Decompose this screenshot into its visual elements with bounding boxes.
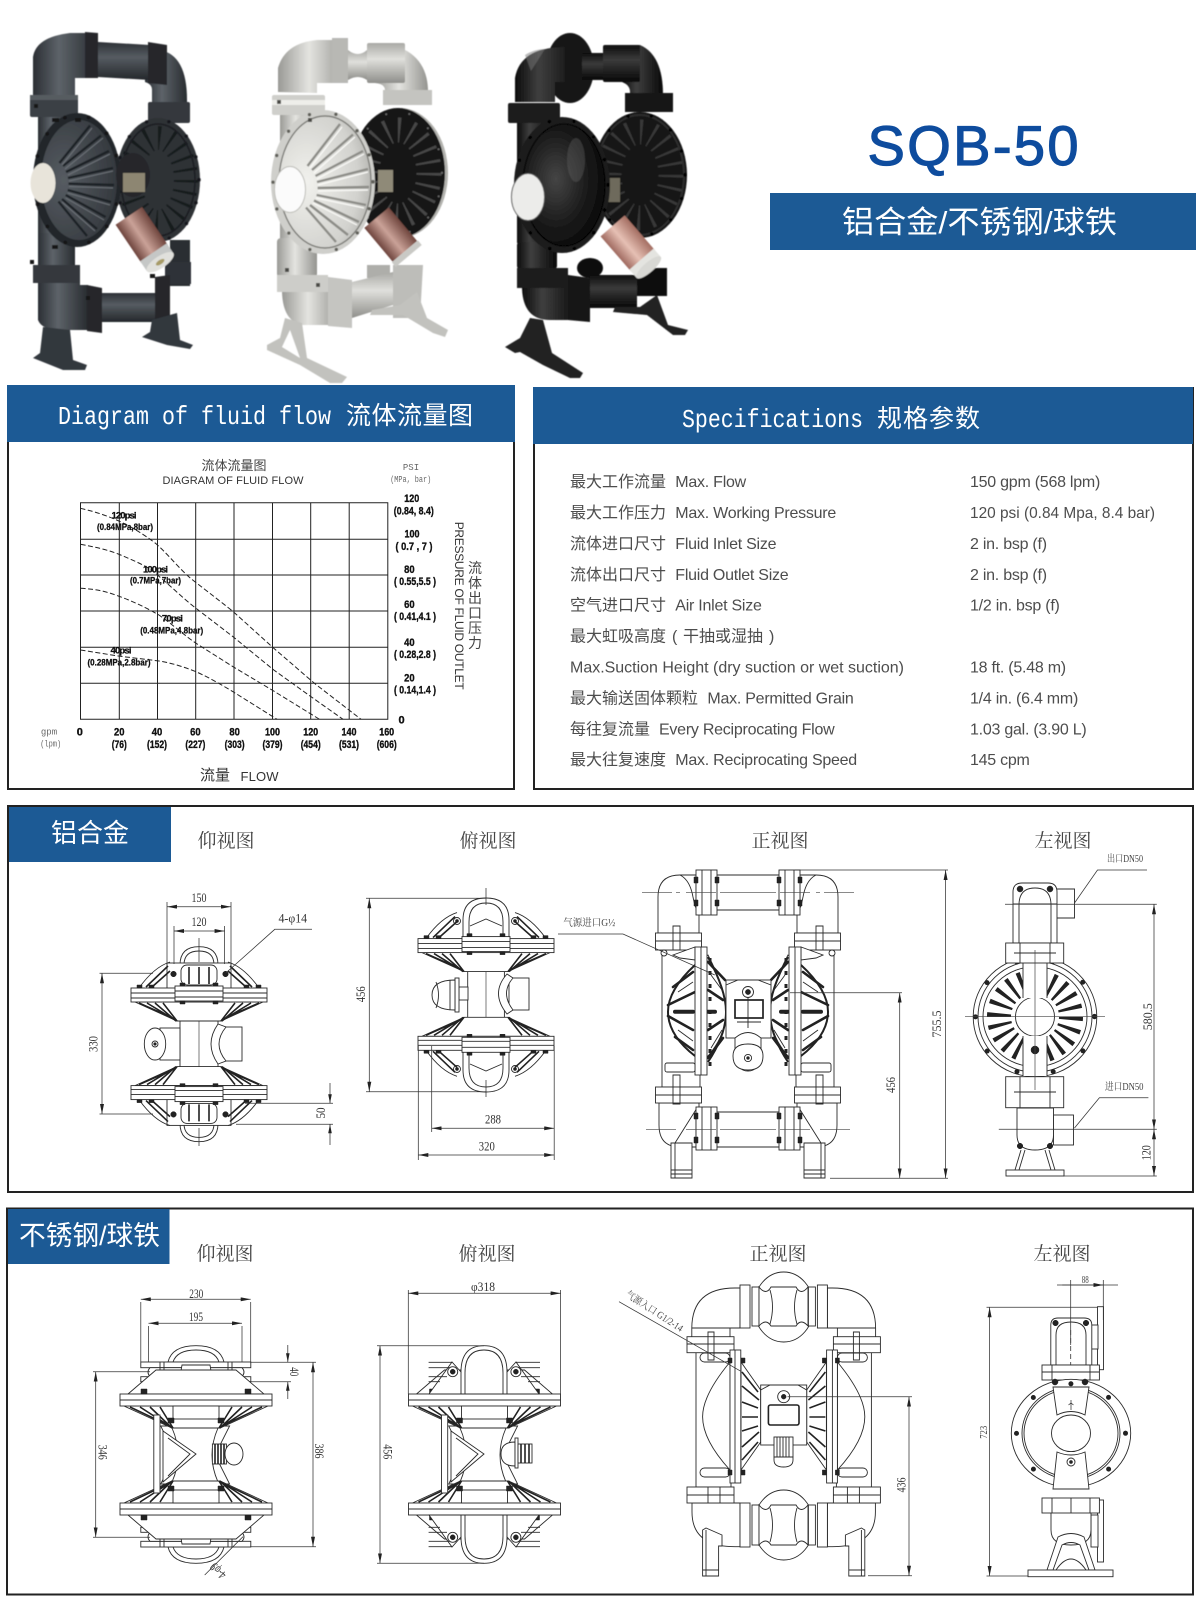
spec rows: 流体出口尺寸 — [570, 567, 666, 584]
y axis title chinese: 流 — [468, 560, 482, 576]
y axis title chinese: 体 — [468, 575, 482, 591]
spec rows: ( — [672, 628, 678, 646]
model title: SQB-50 — [868, 114, 1078, 177]
right axis pressure labels: (0.84, 8.4) — [394, 506, 434, 518]
curve labels: (0.7MPa,7bar) — [130, 576, 181, 586]
spec rows: 最大往复速度 — [570, 752, 666, 769]
spec rows: Max. Working Pressure — [675, 505, 836, 522]
spec rows — [570, 473, 1155, 769]
bottom axis flow labels: gpm — [41, 728, 57, 738]
drawing: aluminium left view: 580.5 — [1140, 1003, 1155, 1030]
view title: 仰视图 — [196, 1243, 254, 1265]
view title: 左视图 — [1034, 830, 1092, 852]
drawing: aluminium left view: 进口DN50 — [1105, 1080, 1144, 1093]
spec rows: 最大输送固体颗粒 — [570, 690, 698, 708]
right axis pressure labels: ( 0.14,1.4 ) — [394, 684, 436, 696]
drawing: stainless bottom view: 230 — [189, 1286, 203, 1301]
view title: 俯视图 — [459, 830, 517, 852]
right axis pressure labels: (MPa, bar) — [390, 475, 431, 485]
spec rows: 1/4 in. (6.4 mm) — [970, 690, 1078, 708]
y axis title chinese: 出 — [468, 590, 482, 606]
drawing: aluminium bottom view: 50 — [313, 1108, 328, 1118]
curve labels: (0.28MPa,2.8bar) — [88, 658, 150, 668]
spec rows: Fluid Inlet Size — [675, 536, 777, 553]
drawing: stainless bottom view: 195 — [189, 1309, 203, 1324]
right axis pressure labels: 120 — [404, 493, 419, 505]
drawing: aluminium left view: 出口DN50 — [1107, 852, 1143, 865]
drawing: aluminium bottom view: 120 — [192, 914, 206, 929]
bottom axis flow labels: (152) — [147, 739, 167, 751]
spec rows: 18 ft. (5.48 m) — [970, 660, 1066, 676]
material tab — [8, 1209, 170, 1264]
view title: 左视图 — [1033, 1243, 1091, 1265]
panel header: 流体流量图 — [346, 402, 473, 430]
spec rows: Fluid Outlet Size — [675, 567, 789, 584]
material banner — [770, 193, 1196, 250]
y axis title chinese — [468, 560, 482, 651]
chart title — [162, 458, 304, 487]
y axis title chinese: 口 — [468, 605, 482, 621]
panel: stainless steel and ductile iron drawings — [7, 1208, 1193, 1594]
drawing: stainless top view: 456 — [380, 1444, 396, 1460]
spec rows: 150 gpm (568 lpm) — [970, 474, 1100, 491]
spec rows: Max. Reciprocating Speed — [675, 752, 857, 769]
panel header — [7, 385, 515, 442]
drawing: stainless front view: 436 — [894, 1477, 908, 1492]
material tab: 不锈钢/球铁 — [19, 1221, 160, 1251]
drawing: aluminium top view — [353, 888, 554, 1160]
right axis pressure labels: 40 — [404, 637, 415, 649]
spec rows: 2 in. bsp (f) — [970, 567, 1047, 584]
drawing: stainless bottom view: 386 — [312, 1444, 327, 1459]
panel header: Specifications — [682, 405, 863, 435]
spec rows: ) — [769, 628, 774, 646]
panel: specifications — [533, 387, 1193, 789]
bottom axis flow labels: (531) — [339, 739, 359, 751]
spec rows: Every Reciprocating Flow — [659, 722, 835, 738]
drawing: stainless left view — [979, 1275, 1131, 1577]
y axis title chinese: 压 — [468, 620, 482, 636]
bottom axis flow labels: 80 — [229, 726, 240, 738]
spec rows: 空气进口尺寸 — [570, 598, 666, 614]
spec rows: 145 cpm — [970, 752, 1030, 769]
panel header — [533, 387, 1193, 444]
right axis pressure labels: 100 — [404, 528, 420, 540]
drawing: stainless top view: φ318 — [471, 1279, 495, 1294]
drawing: stainless bottom view: 346 — [96, 1445, 110, 1460]
right axis pressure labels: PSI — [403, 463, 419, 473]
bottom axis flow labels: 0 — [77, 726, 83, 738]
y axis title chinese: 力 — [468, 635, 482, 651]
spec rows: Max. Permitted Grain — [707, 690, 854, 708]
curve labels: 40psi — [110, 646, 132, 656]
spec rows: 每往复流量 — [570, 722, 650, 738]
material banner: 铝合金/不锈钢/球铁 — [842, 205, 1117, 240]
bottom axis flow labels: (379) — [262, 739, 283, 751]
bottom axis flow labels: (lpm) — [40, 740, 61, 750]
view title: 正视图 — [751, 830, 809, 852]
material tab: 铝合金 — [51, 818, 129, 848]
curve labels — [88, 510, 203, 668]
drawing: stainless front view — [619, 1272, 912, 1576]
drawing: stainless bottom view — [93, 1286, 327, 1582]
spec rows: 1.03 gal. (3.90 L) — [970, 722, 1086, 738]
flow curves — [80, 508, 361, 719]
bottom axis flow labels: (454) — [301, 739, 321, 751]
right axis pressure labels: 60 — [404, 599, 415, 611]
bottom axis flow labels: 100 — [265, 726, 280, 738]
drawing: aluminium top view: 320 — [479, 1138, 495, 1154]
right axis pressure labels — [390, 463, 436, 726]
drawing: stainless bottom view: 4-φ9 — [207, 1560, 229, 1582]
spec rows: 最大工作流量 — [570, 474, 666, 491]
pump photo: aluminium alloy model — [267, 38, 448, 383]
bottom axis flow labels: 140 — [342, 726, 356, 738]
curve labels: (0.48MPa,4.8bar) — [140, 626, 203, 636]
bottom axis flow labels: 60 — [190, 726, 201, 738]
spec rows: 干抽或湿抽 — [683, 628, 763, 646]
bottom axis flow labels: (76) — [112, 739, 127, 751]
bottom axis flow labels: (303) — [225, 739, 245, 751]
right axis pressure labels: ( 0.55,5.5 ) — [394, 576, 436, 588]
y axis title english: PRESSURE OF FLUID OUTLET — [452, 522, 466, 690]
drawing: aluminium left view: 120 — [1138, 1145, 1154, 1160]
drawing: aluminium top view: 456 — [353, 986, 368, 1002]
panel: aluminium alloy drawings — [8, 806, 1193, 1192]
x axis title: FLOW — [240, 769, 279, 784]
right axis pressure labels: 0 — [399, 714, 405, 726]
material tab — [9, 807, 171, 862]
bottom axis flow labels — [40, 726, 397, 751]
spec rows: 流体进口尺寸 — [570, 536, 666, 553]
curve labels: 100psi — [143, 564, 168, 576]
spec rows: 最大工作压力 — [570, 505, 666, 522]
drawing: aluminium front view — [558, 870, 948, 1178]
drawing: aluminium top view: 288 — [485, 1112, 501, 1126]
panel: fluid flow diagram — [7, 385, 515, 789]
curve labels: 70psi — [162, 614, 183, 624]
drawing: stainless left view: 723 — [979, 1426, 990, 1439]
panel header: Diagram of fluid flow — [58, 402, 331, 432]
right axis pressure labels: 20 — [404, 672, 415, 684]
view title: 正视图 — [749, 1243, 807, 1265]
drawing: aluminium bottom view: 330 — [86, 1036, 100, 1052]
bottom axis flow labels: (227) — [185, 739, 206, 751]
drawing: aluminium front view: 气源进口G½ — [563, 916, 616, 929]
right axis pressure labels: ( 0.41,4.1 ) — [394, 611, 436, 623]
drawing: stainless bottom view: 40 — [287, 1367, 302, 1376]
bottom axis flow labels: 160 — [379, 726, 394, 738]
spec rows: Air Inlet Size — [675, 598, 762, 614]
right axis pressure labels: ( 0.28,2.8 ) — [394, 649, 436, 661]
bottom axis flow labels: (606) — [377, 739, 397, 751]
bottom axis flow labels: 20 — [114, 726, 125, 738]
panel header: 规格参数 — [877, 405, 980, 433]
right axis pressure labels: ( 0.7 , 7 ) — [396, 541, 433, 553]
bottom axis flow labels: 40 — [152, 726, 162, 738]
chart title: DIAGRAM OF FLUID FLOW — [162, 475, 304, 487]
drawing: aluminium left view — [965, 852, 1157, 1176]
right axis pressure labels: 80 — [404, 564, 415, 576]
drawing: aluminium front view: 755.5 — [929, 1010, 944, 1038]
x axis title: 流量 — [200, 767, 230, 784]
view title: 俯视图 — [458, 1243, 516, 1265]
drawing: aluminium front view: 456 — [883, 1077, 898, 1093]
pump photo: ductile iron model — [505, 33, 688, 378]
curve labels: 120psi — [112, 510, 136, 522]
x axis title — [200, 767, 279, 784]
chart grid — [80, 503, 388, 719]
spec rows: 1/2 in. bsp (f) — [970, 598, 1060, 614]
spec rows: 最大虹吸高度 — [570, 628, 666, 646]
bottom axis flow labels: 120 — [303, 726, 318, 738]
drawing: stainless left view: 88 — [1082, 1275, 1089, 1286]
view title: 仰视图 — [197, 830, 255, 852]
chart title: 流体流量图 — [201, 458, 267, 473]
pump photo: dark coated model — [30, 32, 200, 370]
drawing: aluminium bottom view: 150 — [192, 890, 206, 905]
spec rows: 120 psi (0.84 Mpa, 8.4 bar) — [970, 505, 1155, 522]
drawing: stainless top view — [377, 1279, 561, 1563]
spec rows: Max.Suction Height (dry suction or wet suction) — [570, 660, 904, 676]
spec rows: Max. Flow — [675, 474, 747, 491]
curve labels: (0.84MPa,8bar) — [97, 522, 153, 533]
drawing: aluminium bottom view — [86, 890, 333, 1146]
spec rows: 2 in. bsp (f) — [970, 536, 1047, 553]
drawing: aluminium bottom view: 4-φ14 — [278, 910, 308, 926]
drawing: stainless front view: 气源入口 G1/2-14 — [623, 1288, 686, 1334]
